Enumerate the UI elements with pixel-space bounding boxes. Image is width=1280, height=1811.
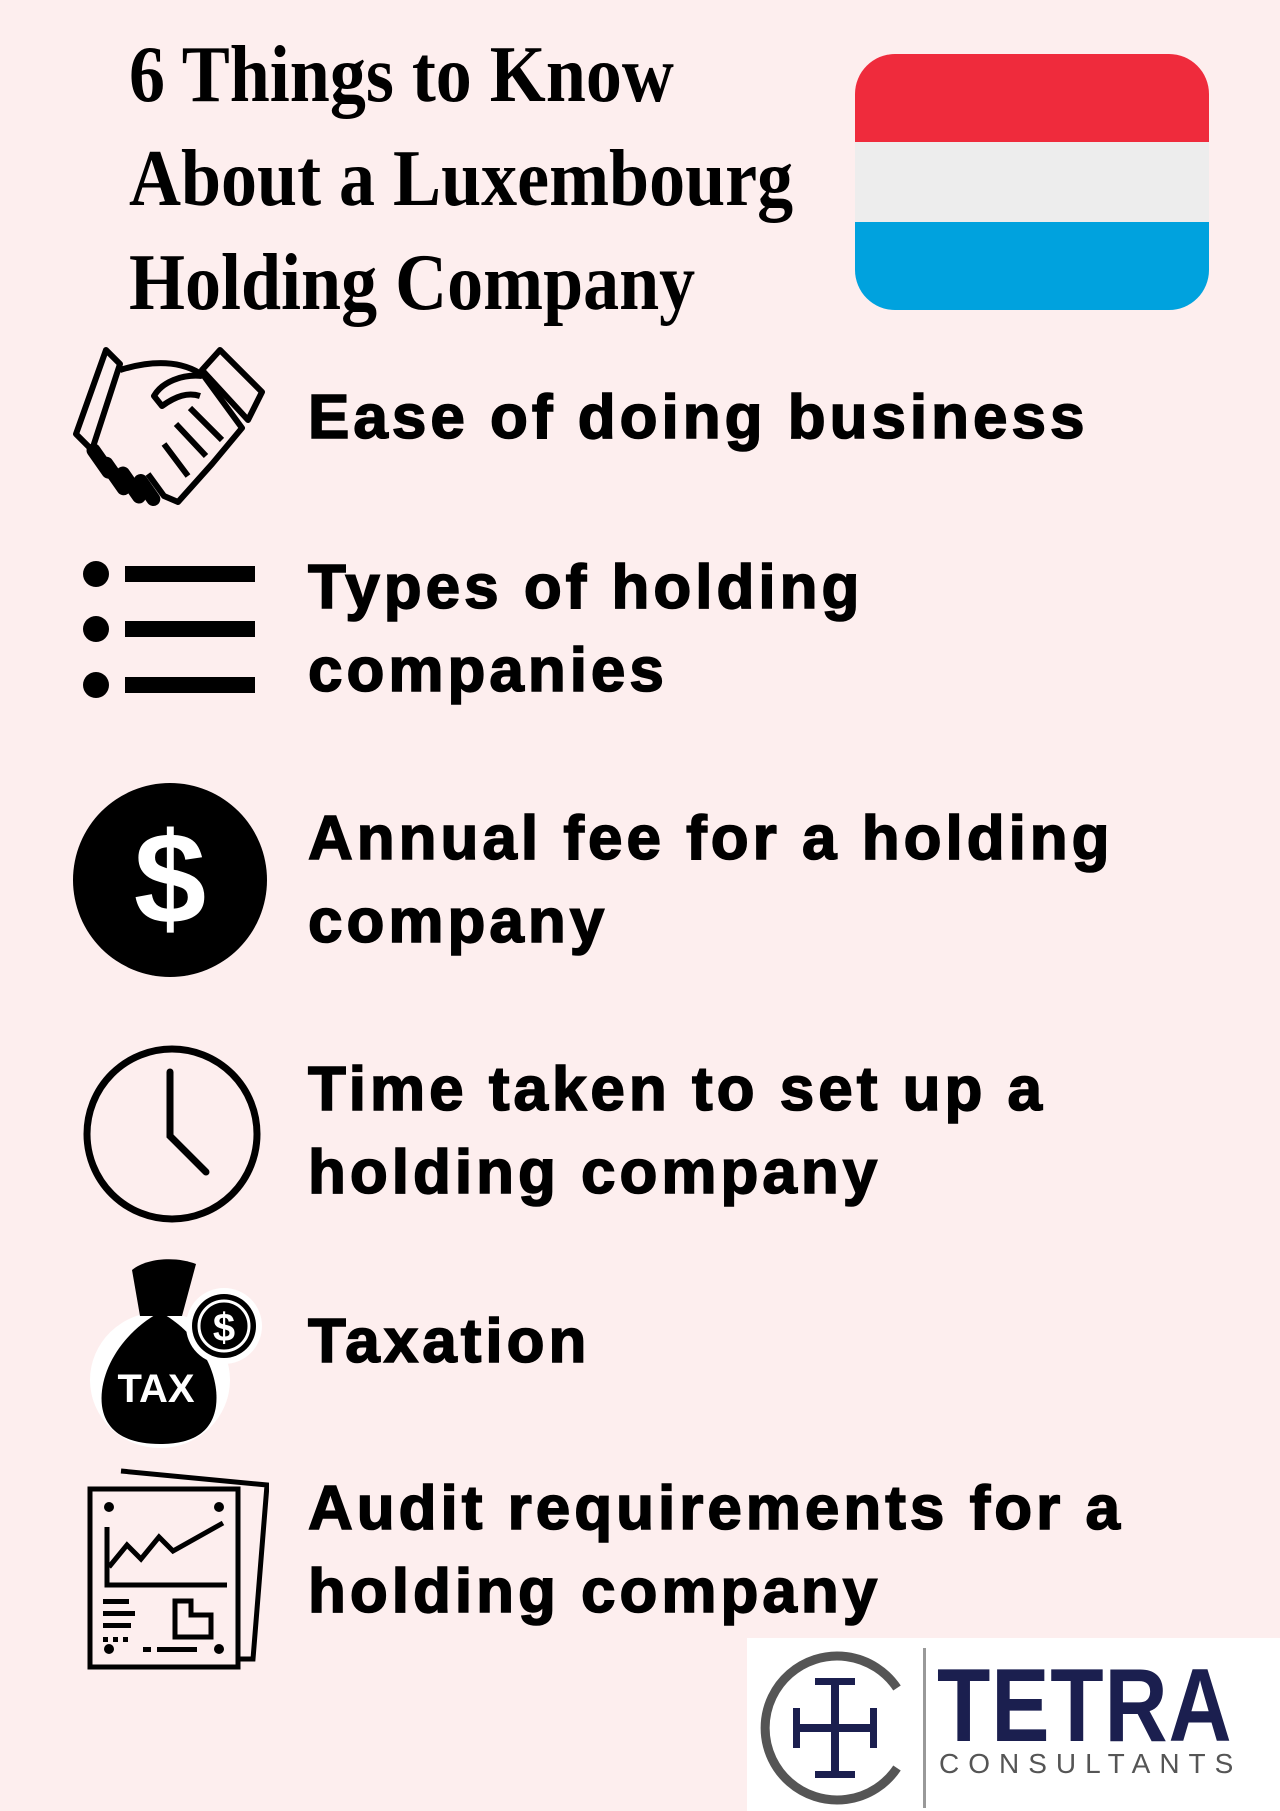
icon: tax bag: $ <box>213 1306 235 1350</box>
icon: dollar <box>73 783 267 977</box>
icon: handshake <box>73 347 266 506</box>
text: time taken: Time taken to set up a <box>308 1055 1046 1124</box>
text: ease of doing business: Ease of doing business <box>308 383 1088 452</box>
logo mark <box>760 1652 901 1804</box>
icon: list <box>83 561 255 698</box>
text: taxation: Taxation <box>308 1307 590 1376</box>
text: time taken: holding company <box>308 1138 881 1207</box>
flag of Luxembourg <box>855 54 1209 310</box>
text: annual fee: Annual fee for a holding <box>308 804 1114 873</box>
text: time taken <box>308 1055 1046 1207</box>
text: audit requirements <box>308 1474 1124 1626</box>
logo: Tetra Consultants <box>747 1638 1280 1811</box>
text: types of holding companies: companies <box>308 636 668 705</box>
text: types of holding companies <box>308 553 863 705</box>
text: annual fee: company <box>308 887 608 956</box>
text: types of holding companies: Types of holding <box>308 553 863 622</box>
title: Holding Company <box>129 239 695 327</box>
icon: tax bag: TAX <box>117 1367 195 1411</box>
logo: Tetra Consultants: CONSULTANTS <box>939 1748 1242 1779</box>
icon: audit document <box>88 1468 269 1670</box>
logo: Tetra Consultants: TETRA <box>937 1648 1232 1764</box>
title <box>129 31 793 327</box>
text: audit requirements: holding company <box>308 1557 881 1626</box>
text: annual fee <box>308 804 1114 956</box>
title: 6 Things to Know <box>129 31 674 119</box>
title: About a Luxembourg <box>129 135 793 223</box>
icon: clock <box>84 1046 260 1222</box>
text: audit requirements: Audit requirements for a <box>308 1474 1124 1543</box>
icon: dollar: $ <box>134 805 206 951</box>
icon: tax bag <box>90 1259 262 1448</box>
